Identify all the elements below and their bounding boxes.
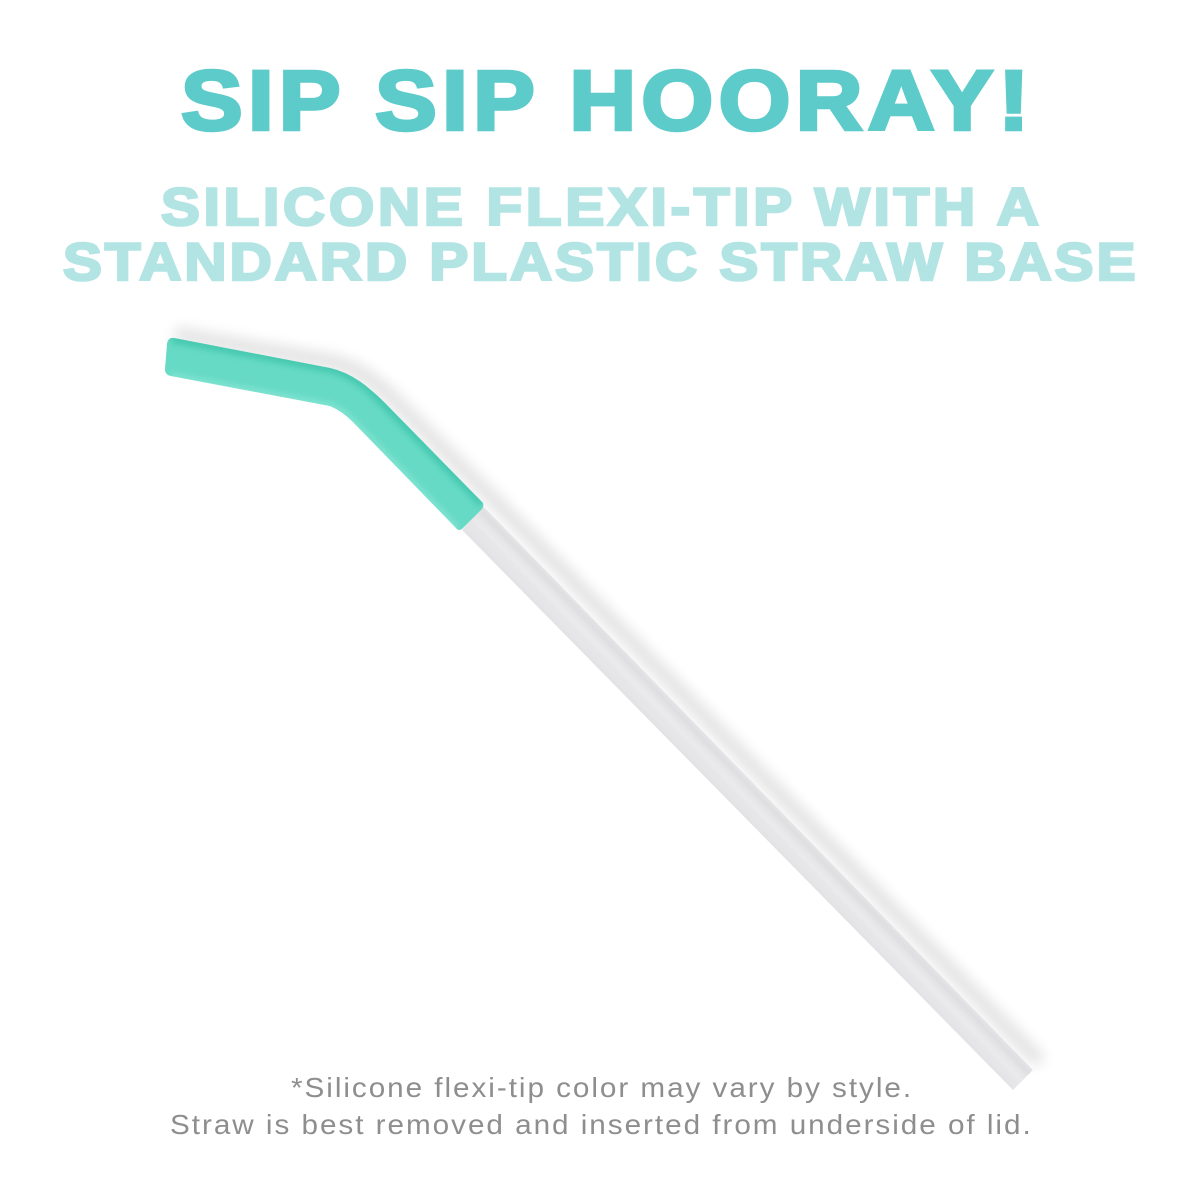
footnote: Straw is best removed and inserted from underside of lid.: [170, 1110, 1031, 1141]
title: SIP SIP HOORAY!: [181, 53, 1029, 148]
infographic canvas: [63, 68, 1135, 1134]
subtitle: SILICONE FLEXI-TIP WITH A: [161, 177, 1039, 236]
plastic straw base: [462, 506, 1033, 1090]
silicone flexi-tip: [160, 330, 490, 535]
straw illustration: [160, 330, 1040, 1090]
straw shadow: [175, 334, 1040, 1062]
subtitle: [63, 177, 1136, 291]
subtitle: STANDARD PLASTIC STRAW BASE: [63, 232, 1136, 291]
footnote: [170, 1073, 1031, 1141]
footnote: *Silicone flexi-tip color may vary by style.: [291, 1073, 911, 1104]
